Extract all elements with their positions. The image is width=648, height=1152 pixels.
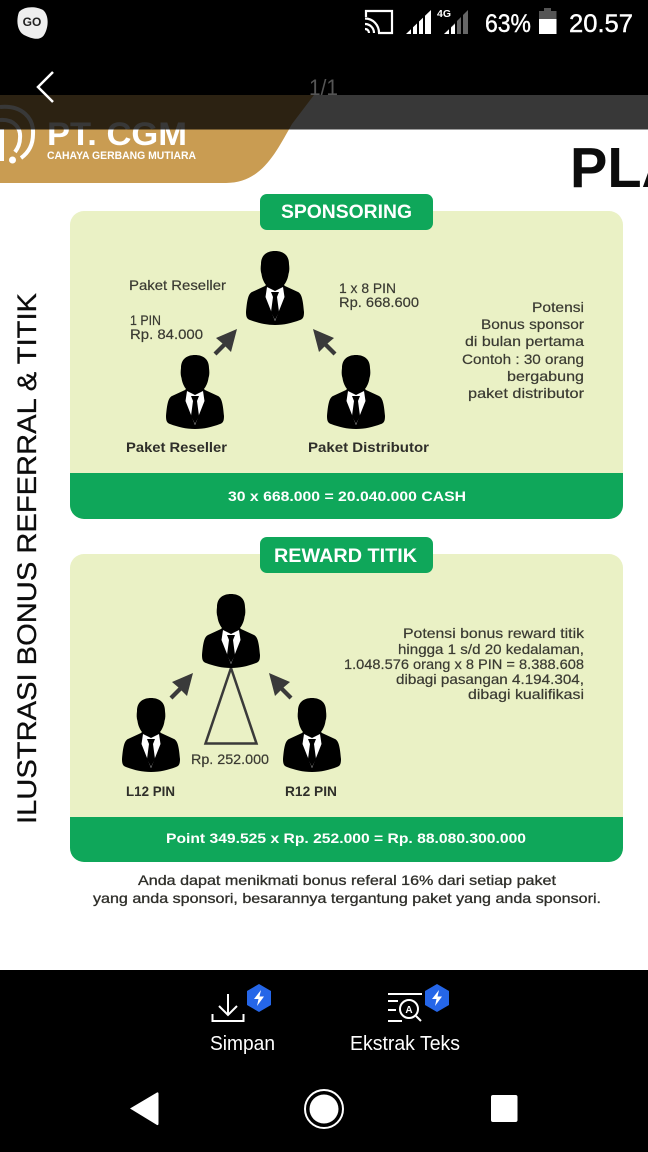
- description text: Bonus sponsor: [481, 316, 584, 332]
- navigation bar: [130, 1090, 518, 1128]
- result band: [70, 473, 623, 519]
- icon: back chevron: [38, 72, 53, 102]
- icon: right person: [327, 355, 385, 429]
- footnote: yang anda sponsori, besarannya tergantung paket yang anda sponsori.: [93, 890, 601, 906]
- action: ekstrak teks: [350, 984, 460, 1055]
- label: Ekstrak Teks: [350, 1033, 460, 1055]
- icon: right person: [283, 698, 341, 772]
- description text: bergabung: [507, 368, 584, 384]
- description text: [344, 625, 585, 702]
- heading pill: [260, 194, 433, 230]
- icon: left person: [166, 355, 224, 429]
- icon: battery: [539, 8, 556, 34]
- icon: cast: [365, 11, 392, 33]
- label: top person: Paket Reseller: [129, 277, 226, 293]
- label: Simpan: [210, 1033, 275, 1055]
- icon: nav recents: [491, 1095, 518, 1122]
- icon: nav home: [305, 1090, 343, 1128]
- icon: top person: [246, 251, 304, 325]
- battery percent: 63%: [485, 10, 531, 38]
- page counter: 1/1: [309, 75, 338, 100]
- description text: paket distributor: [468, 385, 584, 401]
- icon: signal: [406, 8, 468, 34]
- panel: sponsoring: [70, 194, 623, 519]
- result text: Point 349.525 x Rp. 252.000 = Rp. 88.080.300.000: [166, 830, 526, 846]
- description text: dibagi kualifikasi: [468, 686, 584, 702]
- label: left bonus: 1 PIN: [130, 312, 161, 328]
- heading pill: SPONSORING: [281, 202, 412, 223]
- company name: PT. CGM: [47, 116, 187, 152]
- company tagline: CAHAYA GERBANG MUTIARA: [47, 150, 196, 162]
- label: left person: L12 PIN: [126, 783, 175, 799]
- icon: premium badge: [425, 984, 449, 1012]
- clock: 20.57: [569, 10, 633, 38]
- arrow: left to top: [170, 673, 193, 700]
- icon: top person: [202, 594, 260, 668]
- icon: premium badge: [247, 984, 271, 1012]
- icon: download: [212, 994, 244, 1021]
- label: right bonus: Rp. 668.600: [339, 294, 419, 310]
- label: left person: Paket Reseller: [126, 439, 228, 455]
- arrow: right to top: [313, 329, 336, 356]
- footnote: [93, 872, 601, 906]
- description text: Contoh : 30 orang: [462, 351, 584, 367]
- description text: dibagi pasangan 4.194.304,: [396, 671, 584, 687]
- triangle: [206, 668, 256, 744]
- result text: 30 x 668.000 = 20.040.000 CASH: [228, 488, 466, 504]
- logo mark: [0, 107, 33, 162]
- logo banner: [0, 95, 314, 183]
- label: right bonus: 1 x 8 PIN: [339, 280, 396, 296]
- heading pill: [260, 537, 433, 573]
- icon: signal: 4G: [437, 8, 451, 20]
- panel: reward titik: [70, 537, 623, 862]
- action: simpan: [210, 984, 275, 1055]
- description text: Potensi bonus reward titik: [403, 625, 585, 641]
- description text: di bulan pertama: [465, 333, 584, 349]
- description text: Potensi: [532, 299, 584, 315]
- app bar translucent overlay: [0, 95, 648, 130]
- description text: hingga 1 s/d 20 kedalaman,: [398, 641, 584, 657]
- footnote: Anda dapat menikmati bonus referal 16% dari setiap paket: [138, 872, 556, 888]
- label: triangle value: Rp. 252.000: [191, 751, 269, 767]
- label: left bonus: [130, 312, 203, 342]
- description text: 1.048.576 orang x 8 PIN = 8.388.608: [344, 656, 584, 672]
- label: right bonus: [339, 280, 419, 310]
- document page: [0, 95, 648, 970]
- icon: GO app: [17, 7, 48, 39]
- label: right person: Paket Distributor: [308, 439, 430, 455]
- icon: GO app: GO: [23, 15, 41, 29]
- icon: left person: [122, 698, 180, 772]
- icon: text search: A: [405, 1005, 413, 1016]
- label: left bonus: Rp. 84.000: [130, 326, 203, 342]
- status bar: [17, 7, 633, 39]
- label: right person: R12 PIN: [285, 783, 337, 799]
- arrow: left to top: [214, 329, 237, 356]
- vertical heading: ILUSTRASI BONUS REFERRAL & TITIK: [12, 293, 42, 824]
- result band: [70, 817, 623, 862]
- arrow: right to top: [269, 673, 292, 700]
- icon: nav back: [130, 1092, 158, 1125]
- heading pill: REWARD TITIK: [274, 546, 417, 567]
- description text: [462, 299, 584, 401]
